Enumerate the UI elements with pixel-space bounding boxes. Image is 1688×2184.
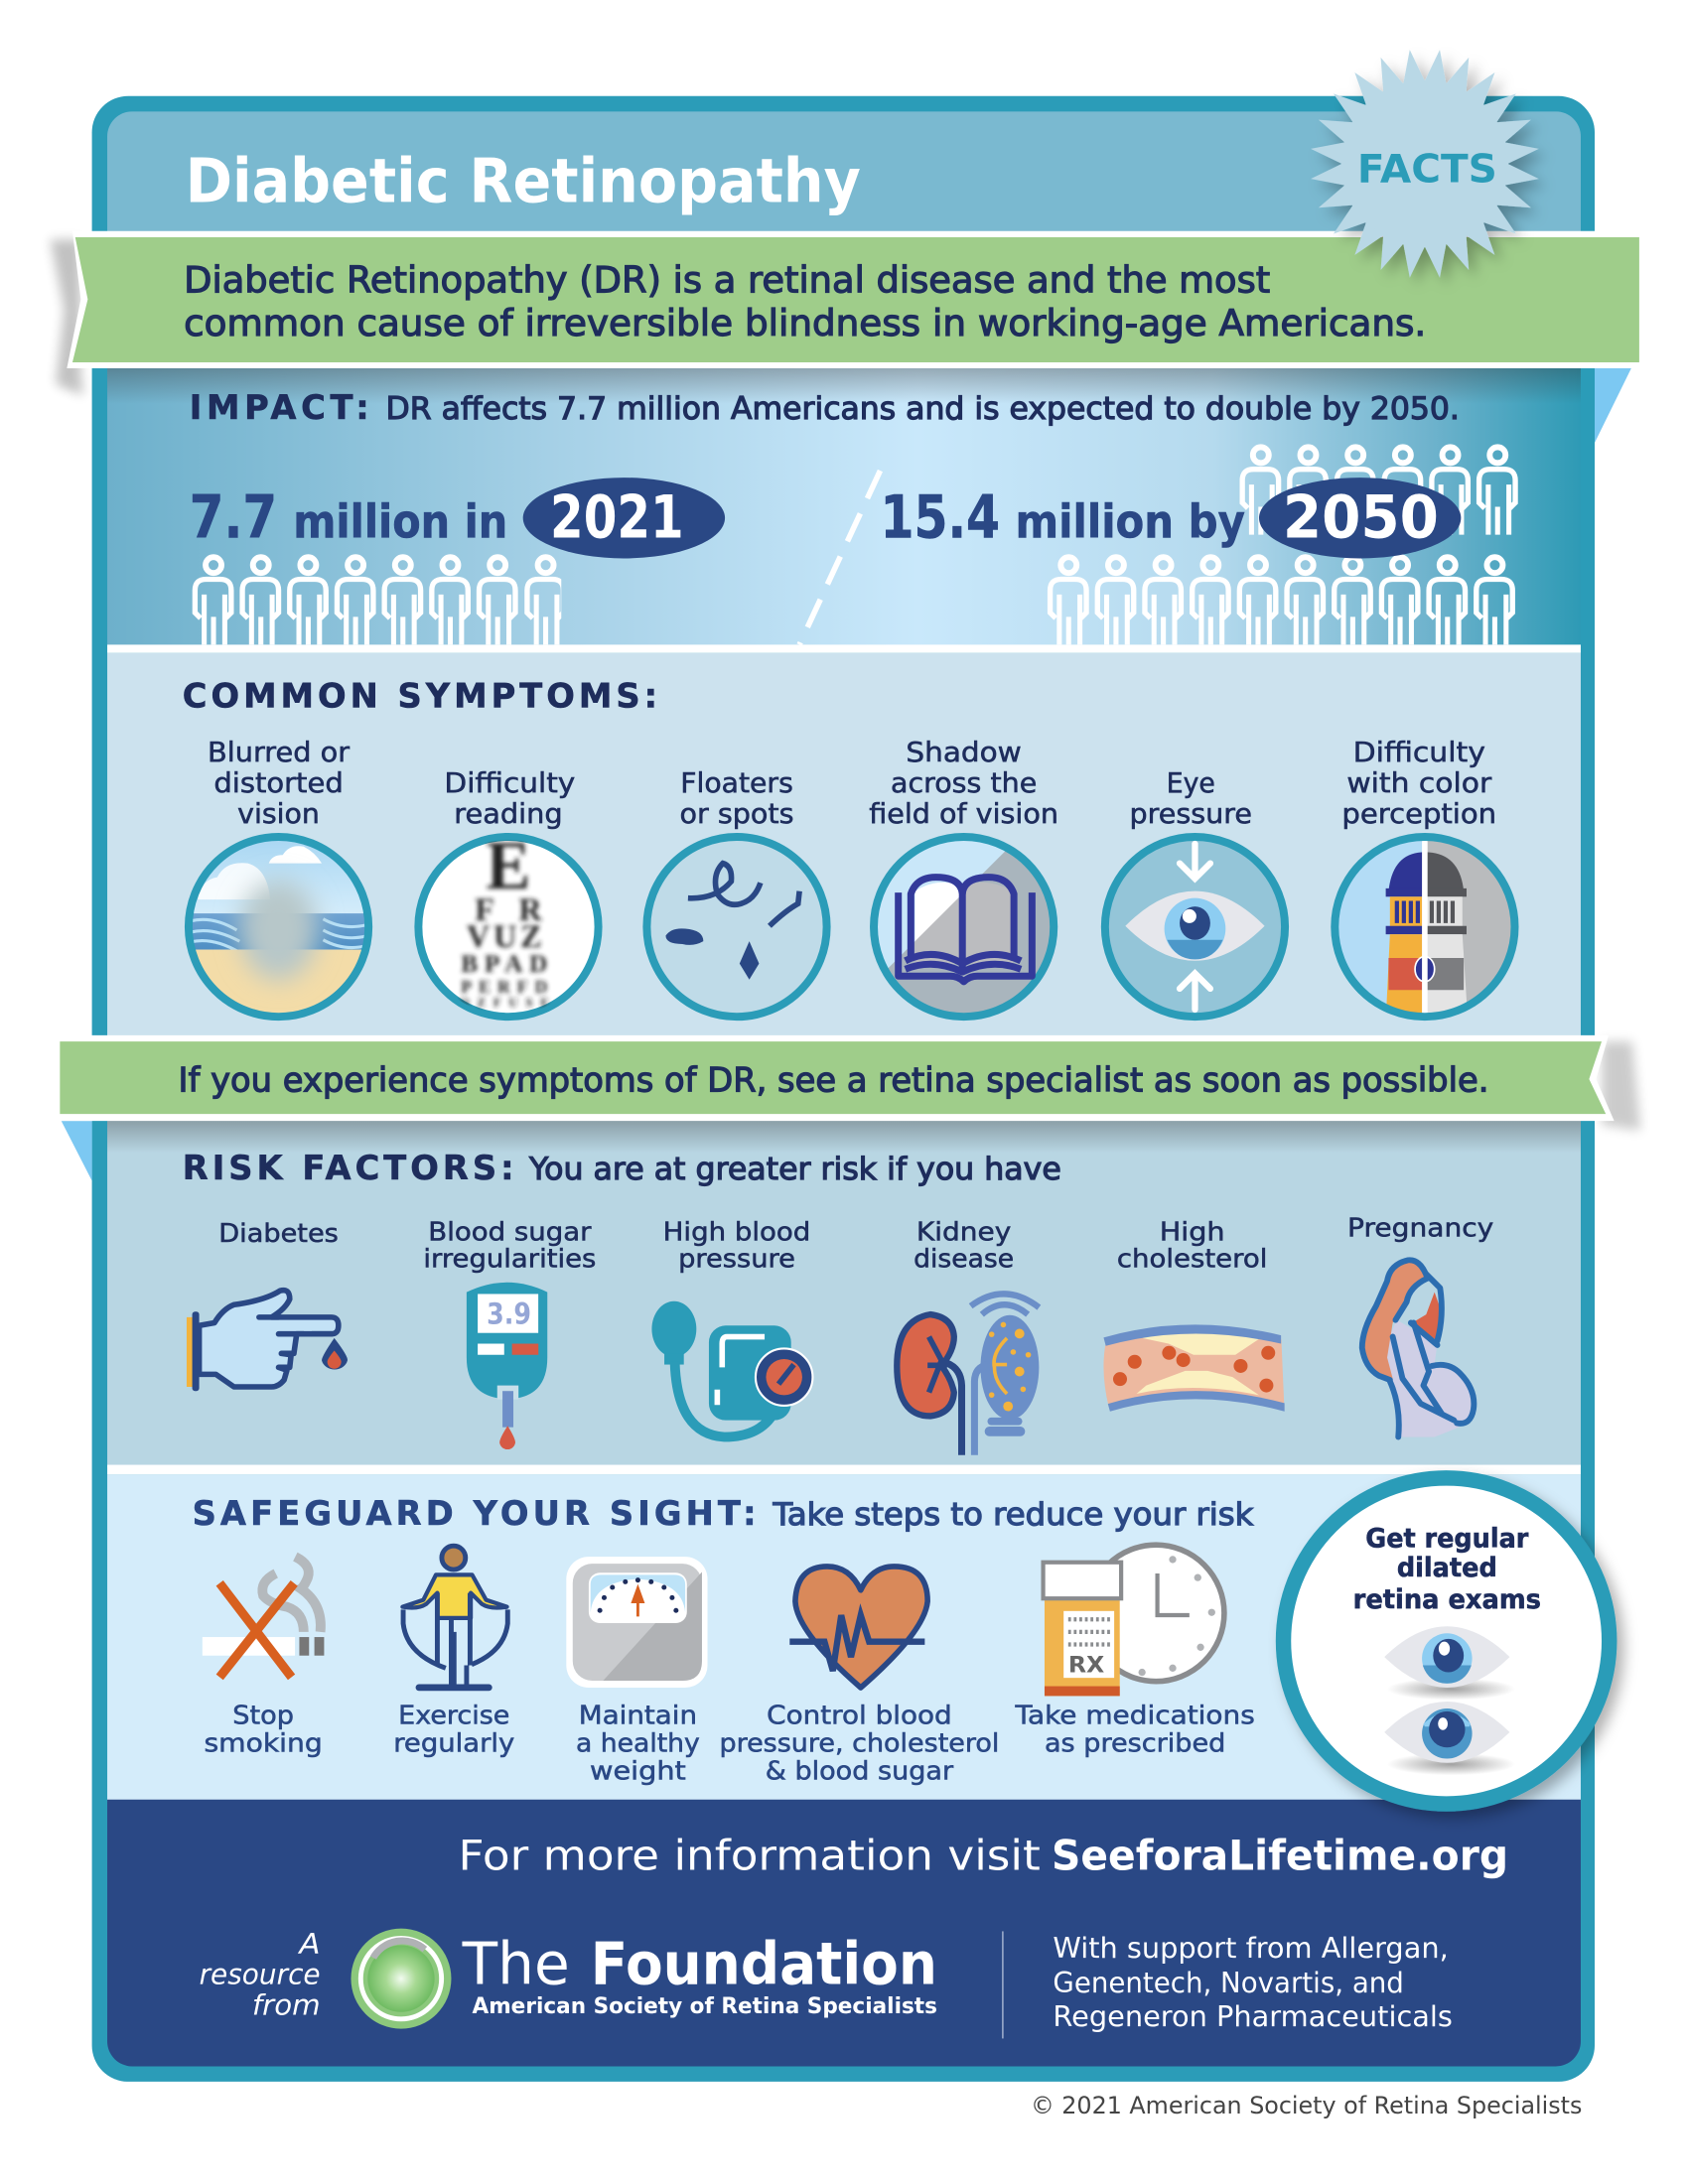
symptom labels: field of vision xyxy=(869,799,1058,830)
icon: hand with blood drop xyxy=(187,1291,348,1391)
panel: sections background xyxy=(107,111,1581,2067)
safeguard labels: Control blood xyxy=(767,1701,952,1730)
icon: blurred beach xyxy=(181,833,376,1027)
stat: 15.4 million by 2050: 2050 xyxy=(1283,483,1439,552)
footer: more information: SeeforaLifetime.org xyxy=(1052,1832,1508,1880)
title: Diabetic Retinopathy xyxy=(186,145,861,216)
icon: lower eye xyxy=(1384,1702,1515,1775)
safeguard labels: pressure, cholesterol xyxy=(719,1728,999,1758)
symptom labels: perception xyxy=(1341,799,1496,830)
heading: safeguard your sight: SAFEGUARD YOUR SIGHT: xyxy=(193,1494,757,1533)
ribbon fold: blue left xyxy=(62,1121,92,1180)
text: exams callout: dilated xyxy=(1397,1553,1497,1583)
text: support: With support from Allergan, xyxy=(1053,1932,1449,1965)
risk labels: Pregnancy xyxy=(1347,1214,1493,1244)
icon: FACTS starburst xyxy=(1310,49,1540,279)
heading: common symptoms: COMMON SYMPTOMS: xyxy=(183,677,657,716)
icon: weight scale xyxy=(566,1557,708,1688)
people: 2050 bottom row xyxy=(1051,557,1512,644)
stat: 15.4 million by 2050 xyxy=(880,478,1461,558)
heading: impact: IMPACT: xyxy=(190,388,369,427)
text: a resource from xyxy=(200,1928,321,2022)
safeguard labels: as prescribed xyxy=(1045,1728,1225,1758)
icon: upper eye xyxy=(1384,1626,1515,1701)
icon: glucose meter: 3.9 xyxy=(487,1297,531,1330)
icon: blurred eye chart: BPAD xyxy=(461,951,547,978)
heading: risk factors: RISK FACTORS: xyxy=(183,1149,514,1187)
symptom labels: Difficulty xyxy=(1353,738,1485,768)
icon: blurred eye chart: OZFUSE xyxy=(460,996,549,1010)
stat: 15.4 million by 2050: million by xyxy=(1016,494,1245,548)
symptom labels: distorted xyxy=(213,768,344,799)
icon: foundation logo xyxy=(351,1929,451,2029)
icon: FACTS starburst: FACTS xyxy=(1357,148,1497,193)
icon: artery with cholesterol xyxy=(1103,1324,1285,1412)
safeguard labels: Exercise xyxy=(398,1701,509,1730)
stat: 7.7 million in 2021: 7.7 xyxy=(190,483,277,552)
text: a resource from: resource xyxy=(200,1959,321,1991)
heading: impact: DR affects 7.7 million Americans and is expected to double by 2050. xyxy=(386,391,1460,427)
heading: safeguard your sight: Take steps to reduce your risk xyxy=(772,1497,1253,1533)
symptom labels: with color xyxy=(1346,768,1492,799)
risk labels: pressure xyxy=(678,1244,795,1274)
logo wordmark xyxy=(462,1930,937,2019)
symptom labels: Shadow xyxy=(906,738,1022,768)
icon: floaters xyxy=(646,837,827,1017)
stat: 7.7 million in 2021: million in xyxy=(293,494,507,548)
text: exams callout: retina exams xyxy=(1353,1584,1541,1615)
logo wordmark: The xyxy=(462,1930,570,1998)
stat: 15.4 million by 2050: 15.4 xyxy=(880,483,1000,552)
panel: definition ribbon xyxy=(51,231,1639,395)
icon: medication bottle and clock xyxy=(1044,1545,1224,1696)
stat: 7.7 million in 2021 xyxy=(190,478,725,558)
icon: blurred eye chart xyxy=(418,828,599,1017)
text: support: Regeneron Pharmaceuticals xyxy=(1053,2000,1453,2033)
text: definition: common cause of irreversible blindness in working-age Americans. xyxy=(184,302,1426,344)
icon: no smoking xyxy=(203,1557,324,1677)
divider: dashed slash xyxy=(799,471,880,644)
symptom labels xyxy=(208,738,1496,830)
risk labels: cholesterol xyxy=(1117,1244,1267,1274)
safeguard labels: Maintain xyxy=(579,1701,697,1730)
heading: safeguard your sight xyxy=(193,1494,1253,1533)
heading: risk factors: You are at greater risk if you have xyxy=(528,1152,1061,1187)
stat: 7.7 million in 2021: 2021 xyxy=(550,483,684,552)
symptom labels: Difficulty xyxy=(444,768,575,799)
icon: pregnant woman xyxy=(1362,1260,1474,1436)
footer divider line xyxy=(1002,1931,1004,2038)
symptom labels: vision xyxy=(237,799,320,830)
symptom labels: Floaters xyxy=(680,768,793,799)
panel: see specialist ribbon xyxy=(60,1035,1640,1131)
icon: blurred eye chart: F R xyxy=(475,891,542,927)
safeguard labels: Stop xyxy=(232,1701,294,1730)
ribbon fold: blue right xyxy=(1595,366,1632,443)
heading: risk factors xyxy=(183,1149,1061,1187)
icon: person jumping rope xyxy=(402,1546,507,1691)
icon: heart with ECG xyxy=(789,1567,927,1688)
icon: blurred eye chart: PERFD xyxy=(461,977,547,997)
safeguard labels xyxy=(204,1701,1255,1787)
text: a resource from: from xyxy=(252,1989,321,2022)
icon: eye pressure xyxy=(1105,837,1285,1017)
risk labels: Diabetes xyxy=(218,1219,339,1249)
text: definition xyxy=(184,259,1426,344)
safeguard labels: weight xyxy=(590,1757,686,1787)
people: top row 2050 xyxy=(1242,447,1515,535)
symptom labels: or spots xyxy=(679,799,794,830)
callout: dilated retina exams xyxy=(1284,1478,1610,1804)
safeguard labels: a healthy xyxy=(576,1728,700,1758)
risk labels: irregularities xyxy=(423,1244,596,1274)
text: a resource from: A xyxy=(297,1928,321,1961)
text: exams callout: Get regular xyxy=(1365,1523,1529,1554)
risk labels: Kidney xyxy=(916,1218,1011,1248)
icon: blurred eye chart: E xyxy=(487,828,530,904)
safeguard labels: smoking xyxy=(204,1728,323,1758)
risk labels: High xyxy=(1160,1218,1225,1248)
icon: kidney xyxy=(897,1294,1039,1455)
icon: glucose meter xyxy=(467,1283,547,1449)
risk labels: disease xyxy=(914,1244,1014,1274)
symptom labels: Blurred or xyxy=(208,738,351,768)
safeguard labels: Take medications xyxy=(1014,1701,1255,1730)
text: support xyxy=(1053,1932,1453,2033)
text: support: Genentech, Novartis, and xyxy=(1053,1967,1404,1999)
text: exams callout xyxy=(1353,1523,1541,1615)
symptom labels: pressure xyxy=(1130,799,1252,830)
symptom labels: Eye xyxy=(1167,768,1215,799)
logo wordmark: American Society of Retina Specialists xyxy=(473,1993,937,2019)
icon: book with shadow xyxy=(871,833,1058,1023)
risk labels: Blood sugar xyxy=(428,1218,592,1248)
footer: more information xyxy=(458,1832,1508,1880)
symptom labels: across the xyxy=(891,768,1037,799)
footer: more information: For more information visit xyxy=(458,1832,1041,1880)
people: 2021 row xyxy=(195,557,563,644)
icon: medication bottle and clock: RX xyxy=(1068,1653,1104,1679)
logo wordmark: Foundation xyxy=(591,1930,937,1998)
text: copyright: © 2021 American Society of Retina Specialists xyxy=(1031,2092,1582,2119)
safeguard labels: regularly xyxy=(393,1728,514,1758)
risk labels: High blood xyxy=(663,1218,810,1248)
text: definition: Diabetic Retinopathy (DR) is a retinal disease and the most xyxy=(184,259,1270,302)
safeguard labels: & blood sugar xyxy=(766,1757,953,1787)
icon: blurred eye chart: VUZ xyxy=(467,918,542,954)
text: see a retina specialist: If you experience symptoms of DR, see a retina specialist as soon as possible. xyxy=(179,1061,1488,1100)
icon: blood pressure cuff xyxy=(651,1301,812,1436)
symptom labels: reading xyxy=(454,799,563,830)
risk labels xyxy=(218,1214,1493,1274)
icon: lighthouse color perception xyxy=(1331,833,1519,1023)
